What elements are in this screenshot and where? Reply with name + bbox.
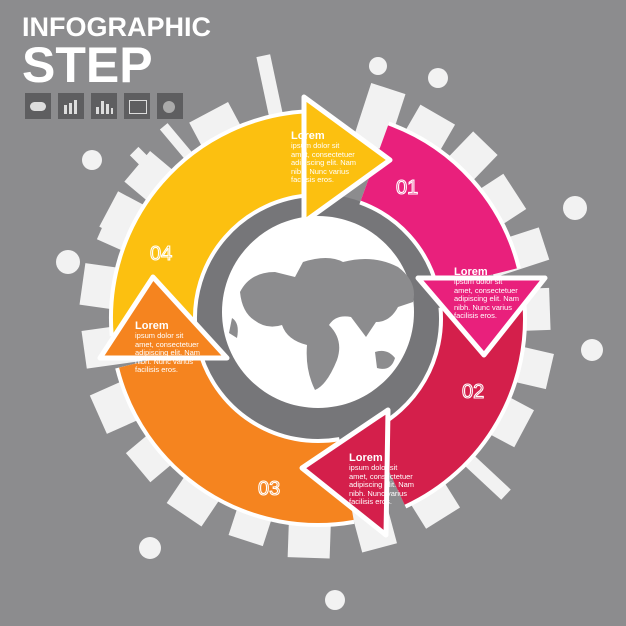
text: step 2: adipiscing elit. Nam xyxy=(454,294,519,303)
text: step 3: nibh. Nunc varius xyxy=(349,489,407,498)
text: step 2 xyxy=(454,266,519,320)
arrowhead pink xyxy=(418,278,545,355)
icon row xyxy=(25,93,183,119)
arrowhead orange xyxy=(100,277,227,358)
text: step 3: facilisis eros. xyxy=(349,497,392,506)
arrowhead red xyxy=(302,410,388,535)
text: step 2: ipsum dolor sit xyxy=(454,277,502,286)
step numbers: 04 xyxy=(150,243,172,265)
text: step 2: nibh. Nunc varius xyxy=(454,303,512,312)
text: step 4 xyxy=(135,320,200,374)
text: step 3: Lorem xyxy=(349,452,383,464)
text: step 4: amet, consectetuer xyxy=(135,340,199,349)
globe xyxy=(222,216,414,408)
inner shadow ring xyxy=(194,194,442,442)
text: step 4: facilisis eros. xyxy=(135,365,178,374)
text: step 4: ipsum dolor sit xyxy=(135,331,183,340)
text: step 2: facilisis eros. xyxy=(454,311,497,320)
ring bodies white outline xyxy=(153,153,483,483)
title: INFOGRAPHIC xyxy=(22,12,211,42)
skyline around ring xyxy=(56,54,603,610)
text: step 4: nibh. Nunc varius xyxy=(135,357,193,366)
step numbers xyxy=(150,177,484,500)
text: step 3: adipiscing elit. Nam xyxy=(349,480,414,489)
step numbers: 01 xyxy=(396,177,418,199)
text: step 3: ipsum dolor sit xyxy=(349,463,397,472)
step numbers: 03 xyxy=(258,478,280,500)
text: step 2: amet, consectetuer xyxy=(454,286,518,295)
text: step 1 xyxy=(291,130,356,184)
title xyxy=(22,12,211,93)
text: step 4: adipiscing elit. Nam xyxy=(135,348,200,357)
text: step 1: Lorem xyxy=(291,130,325,142)
text: step 1: nibh. Nunc varius xyxy=(291,167,349,176)
text: step 4: Lorem xyxy=(135,320,169,332)
text: step 3: amet, consectetuer xyxy=(349,472,413,481)
arrowhead yellow xyxy=(304,97,390,222)
text: step 1: amet, consectetuer xyxy=(291,150,355,159)
step numbers: 02 xyxy=(462,381,484,403)
title: STEP xyxy=(22,37,153,93)
text: step 1: adipiscing elit. Nam xyxy=(291,158,356,167)
text: step 2: Lorem xyxy=(454,266,488,278)
text: step 1: ipsum dolor sit xyxy=(291,141,339,150)
text: step 1: facilisis eros. xyxy=(291,175,334,184)
text: step 3 xyxy=(349,452,414,506)
